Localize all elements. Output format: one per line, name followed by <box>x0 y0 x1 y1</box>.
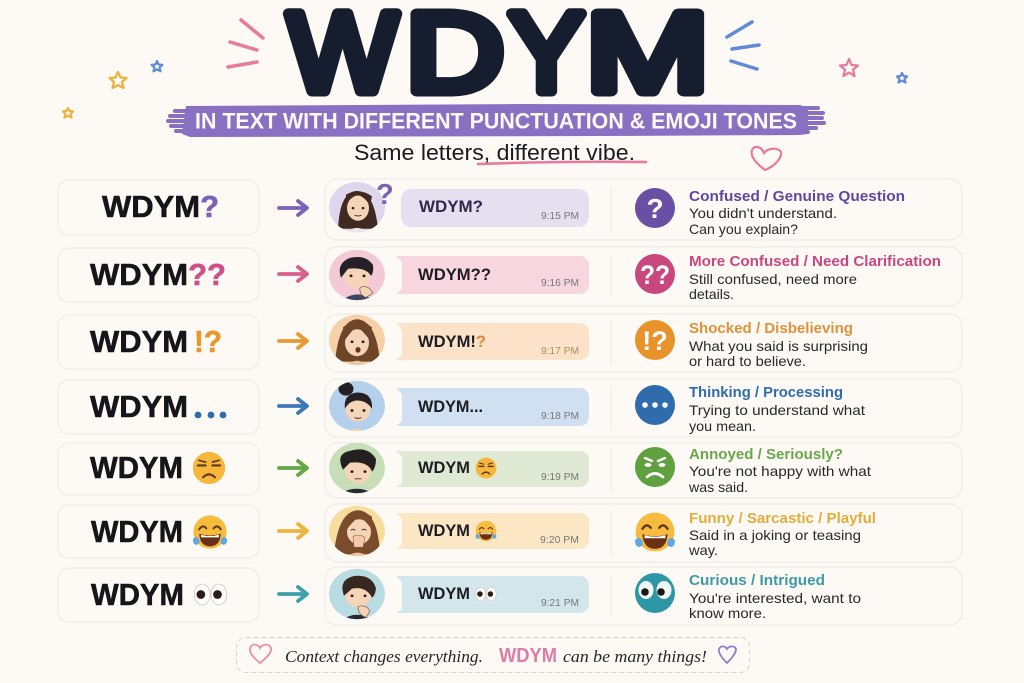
bubble 6 <box>396 513 589 549</box>
title <box>288 0 709 115</box>
conversation card 3 <box>325 314 962 372</box>
bubble 3: WDYM!? <box>418 333 486 351</box>
row 4: WDYM... <box>58 379 962 437</box>
bubble 7 <box>396 576 589 613</box>
conversation card 1 <box>325 179 962 240</box>
avatar 3 <box>329 315 385 367</box>
meaning 5: You're not happy with what <box>689 463 871 479</box>
conversation card 6 <box>325 504 962 562</box>
meaning icon 3 <box>635 320 675 360</box>
input card 2: WDYM?? <box>90 257 226 292</box>
bubble 4: WDYM... <box>418 398 483 416</box>
meaning icon 1: ? <box>646 193 664 224</box>
bubble 7: 9:21 PM <box>541 598 579 609</box>
meaning icon 5 <box>635 447 675 487</box>
bubble 1: WDYM? <box>419 198 483 216</box>
meaning 3: or hard to believe. <box>689 353 806 369</box>
meaning icon 7 <box>635 573 675 613</box>
icon: footer pink heart <box>250 645 271 663</box>
bubble 7: WDYM <box>418 585 470 603</box>
meaning 6: Funny / Sarcastic / Playful <box>689 511 876 527</box>
conversation card 5 <box>325 443 962 498</box>
meaning 2: Still confused, need more <box>689 271 857 287</box>
bubble 1 <box>401 189 589 227</box>
bubble 3: 9:17 PM <box>541 346 579 357</box>
bubble 5 <box>396 451 589 487</box>
meaning icon 1 <box>635 188 675 228</box>
avatar 5 <box>329 443 385 495</box>
conversation card 4 <box>325 379 962 437</box>
meaning 5 <box>688 447 871 495</box>
row 3: WDYM!? <box>58 314 962 372</box>
tagline: Same letters, different vibe. <box>354 140 635 165</box>
footer text: can be many things! <box>563 647 707 666</box>
input card 6: WDYM <box>91 514 183 549</box>
meaning 2 <box>689 254 941 302</box>
meaning 2: More Confused / Need Clarification <box>689 254 941 270</box>
input card 6 <box>58 505 259 558</box>
mark: question: ? <box>376 179 394 211</box>
input card 1 <box>58 180 259 235</box>
meaning 6: way. <box>688 542 718 558</box>
avatar 7 <box>329 569 385 621</box>
input card 3: !? <box>194 324 222 359</box>
bubble 2: WDYM?? <box>418 266 491 284</box>
conversation card 7 <box>325 567 962 625</box>
arrow 4 <box>279 399 307 413</box>
row 7: WDYM eyes <box>58 567 962 625</box>
input card 4: WDYM <box>90 389 188 424</box>
meaning 4: Thinking / Processing <box>689 385 843 401</box>
meaning 3: What you said is surprising <box>689 338 868 354</box>
avatar 4 <box>329 381 385 436</box>
meaning 1 <box>689 189 905 237</box>
meaning icon 3: !? <box>642 326 668 356</box>
arrow 2 <box>279 267 307 281</box>
bubble 6: 9:20 PM <box>540 535 579 546</box>
input card 7: WDYM <box>91 577 184 612</box>
meaning 7: You're interested, want to <box>689 590 861 606</box>
bubble 2: 9:16 PM <box>541 278 579 289</box>
arrow 1 <box>279 201 307 215</box>
icon: pink heart <box>752 147 781 170</box>
meaning icon 2 <box>635 254 675 294</box>
meaning 1: You didn't understand. <box>689 205 837 221</box>
row 6: WDYM laughing <box>58 504 962 562</box>
input card 1: WDYM? <box>102 189 219 224</box>
avatar 6 <box>329 506 385 558</box>
input card 5 <box>58 443 259 495</box>
input card 5: WDYM <box>90 450 183 485</box>
arrow 7 <box>279 587 307 601</box>
footer callout <box>236 638 750 672</box>
stars <box>63 59 907 118</box>
meaning 3: Shocked / Disbelieving <box>689 321 853 337</box>
footer text: WDYM <box>499 645 557 667</box>
input card 3: WDYM <box>90 324 188 359</box>
input card 2 <box>58 248 259 302</box>
bubble 3 <box>396 323 589 360</box>
meaning 2: details. <box>689 286 734 302</box>
meaning 7: Curious / Intrigued <box>689 573 825 589</box>
bubble 4 <box>396 388 589 426</box>
meaning icon 6 <box>635 513 675 551</box>
bubble 2 <box>396 256 589 294</box>
bubble 5: 9:19 PM <box>541 472 579 483</box>
banner: subtitle ribbon: IN TEXT WITH DIFFERENT PUNCTUATION & EMOJI TONES <box>195 108 797 134</box>
avatar 2 <box>329 250 385 302</box>
meaning 4: Trying to understand what <box>689 402 865 418</box>
conversation card 2 <box>325 247 962 306</box>
meaning icon 2: ?? <box>640 260 670 290</box>
meaning 7: know more. <box>689 605 766 621</box>
row 1: WDYM? <box>58 179 962 240</box>
meaning 6: Said in a joking or teasing <box>689 527 861 543</box>
meaning 4: you mean. <box>689 418 756 434</box>
avatar 1 <box>329 182 385 236</box>
meaning 7 <box>689 573 861 621</box>
arrow 3 <box>279 334 307 348</box>
input card 3 <box>58 315 259 369</box>
arrow 6 <box>279 524 307 538</box>
meaning 4 <box>689 385 865 434</box>
bubble 5: WDYM <box>418 459 470 477</box>
meaning 5: Annoyed / Seriously? <box>689 447 843 463</box>
meaning 6 <box>688 511 876 558</box>
meaning 3 <box>689 321 868 369</box>
meaning 5: was said. <box>688 479 748 495</box>
burst lines: pink <box>228 20 263 67</box>
bubble 4: 9:18 PM <box>541 411 579 422</box>
meaning 1: Confused / Genuine Question <box>689 189 905 205</box>
bubble 6: WDYM <box>418 522 470 540</box>
icon: footer purple heart <box>719 646 736 663</box>
row 2: WDYM?? <box>58 247 962 306</box>
burst lines: blue <box>727 22 759 69</box>
meaning icon 4 <box>635 385 675 425</box>
footer text: Context changes everything. <box>285 647 483 666</box>
row 5: WDYM annoyed <box>58 443 962 498</box>
input card 7 <box>58 568 259 622</box>
bubble 1: 9:15 PM <box>541 211 579 222</box>
input card 4 <box>58 380 259 434</box>
arrow 5 <box>279 461 307 475</box>
meaning 1: Can you explain? <box>689 221 798 237</box>
